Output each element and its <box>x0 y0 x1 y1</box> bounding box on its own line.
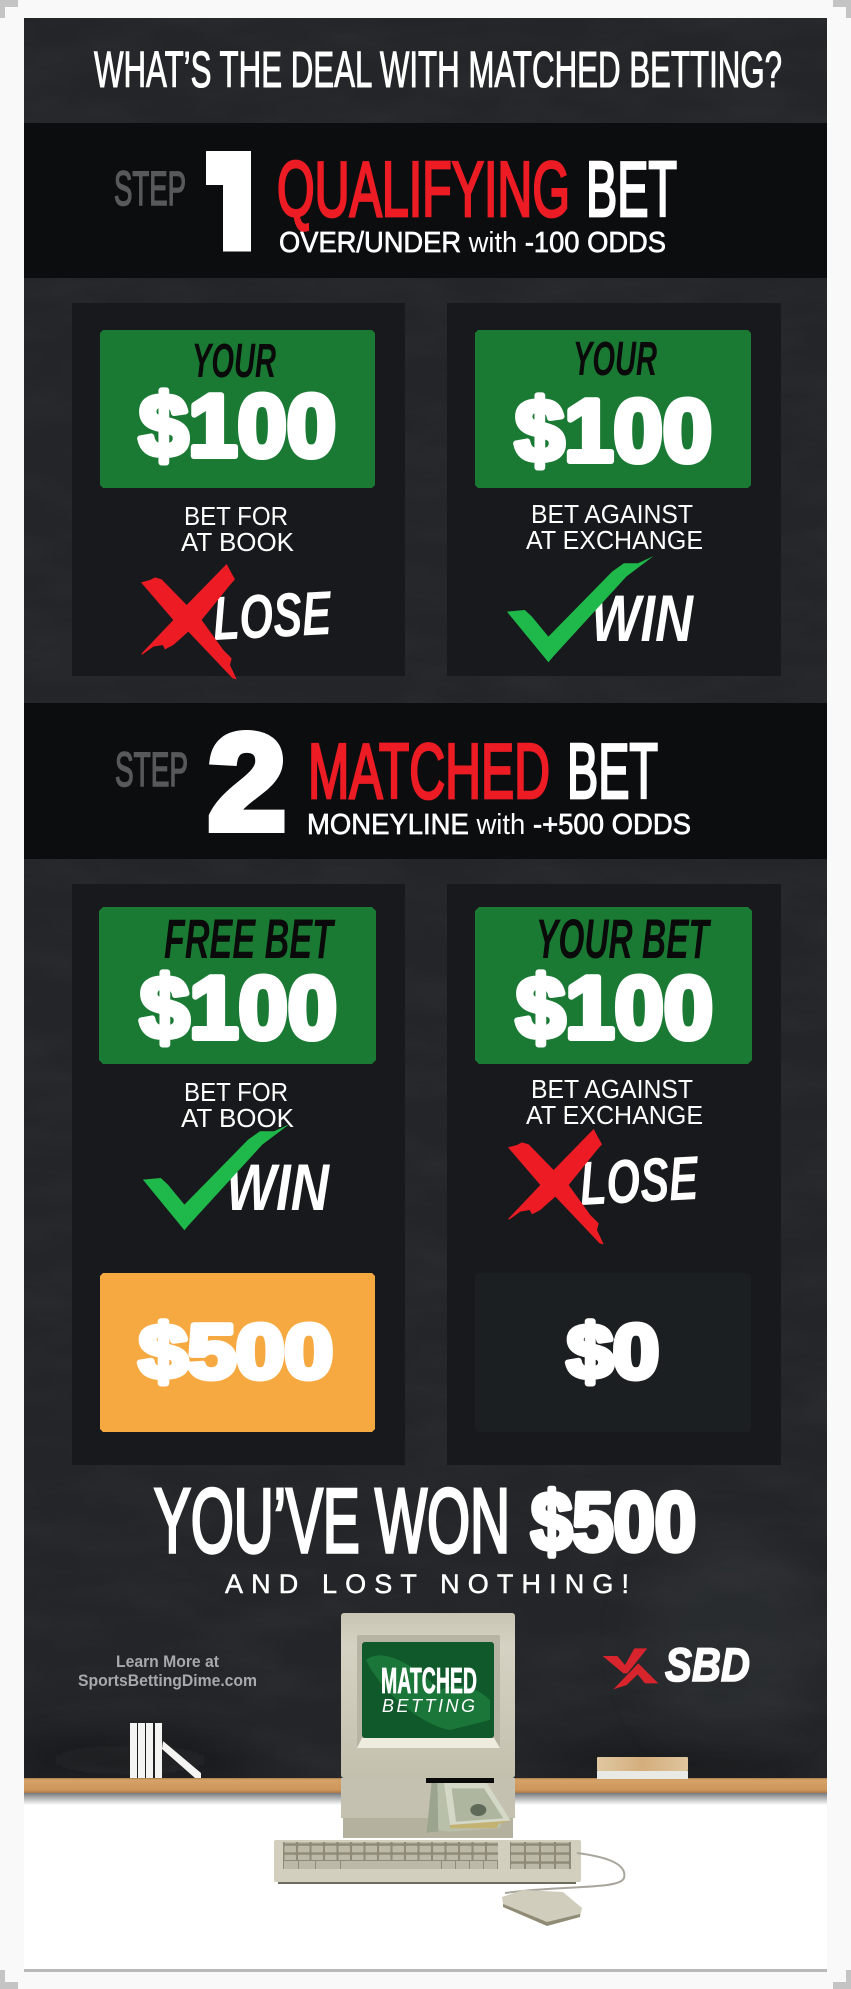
lose result <box>141 564 334 679</box>
logo wordmark: SBD <box>665 1638 750 1691</box>
panel: step 2 left column <box>72 884 405 1465</box>
lose result: LOSE <box>211 579 334 654</box>
step 2 subheading: MONEYLINE with -+500 ODDS <box>307 809 691 841</box>
card: your bet $100 <box>475 907 752 1064</box>
bet description: AT BOOK <box>181 527 295 557</box>
logo mark <box>603 1648 658 1689</box>
lose result <box>508 1129 701 1244</box>
card label: FREE BET <box>164 907 336 970</box>
conclusion subline: AND LOST NOTHING! <box>225 1569 629 1599</box>
learn more link <box>78 1653 257 1690</box>
step 2 heading: MATCHED <box>308 727 550 815</box>
step 1 heading: QUALIFYING <box>277 145 570 233</box>
card label: YOUR <box>192 335 276 388</box>
icon: eraser <box>597 1757 688 1779</box>
card amount: $100 <box>515 381 712 480</box>
screen title: MATCHED <box>381 1660 477 1701</box>
panel: step 1 right column <box>447 303 781 676</box>
card: free bet $100 <box>99 907 376 1064</box>
ledge: chalk tray <box>24 1778 827 1805</box>
monitor <box>341 1613 515 1838</box>
lose result: LOSE <box>578 1144 701 1219</box>
bet description: AT EXCHANGE <box>526 525 703 555</box>
card: your $100 <box>100 330 375 488</box>
bet description: BET AGAINST <box>531 499 693 529</box>
icon: cash <box>427 1782 511 1833</box>
icon: books <box>130 1723 201 1778</box>
win result <box>507 556 694 662</box>
cash slot <box>426 1778 494 1783</box>
icon: red X <box>508 1129 604 1244</box>
card label: YOUR BET <box>536 907 712 970</box>
total winnings: $500 <box>531 1475 696 1568</box>
bet description: BET AGAINST <box>531 1074 693 1104</box>
step 1 subheading: OVER/UNDER with -100 ODDS <box>279 227 666 259</box>
learn more link: Learn More at <box>116 1653 219 1671</box>
card amount: $100 <box>516 958 713 1057</box>
bet description: AT EXCHANGE <box>526 1100 703 1130</box>
card label: YOUR <box>573 333 657 386</box>
mouse <box>502 1890 582 1926</box>
step 2 heading: BET <box>567 727 658 815</box>
card: $0 <box>475 1273 751 1432</box>
icon: red X <box>141 564 237 679</box>
screen subtitle: BETTING <box>382 1696 475 1716</box>
step 1 label: STEP <box>114 163 186 216</box>
panel: step 2 heading band <box>24 703 827 859</box>
illustration: retro computer <box>274 1613 624 1926</box>
panel: step 2 right column <box>447 884 781 1465</box>
step 1 number: 1 <box>150 126 310 275</box>
bet description: BET FOR <box>184 1077 288 1107</box>
card amount: $100 <box>139 376 336 475</box>
loss amount: $0 <box>567 1310 659 1395</box>
step 1 heading: BET <box>586 145 677 233</box>
win result <box>143 1124 330 1230</box>
monitor screen <box>362 1642 494 1738</box>
bet description: AT BOOK <box>181 1103 295 1133</box>
step 2 number: 2 <box>208 706 286 858</box>
winnings amount: $500 <box>139 1310 333 1395</box>
icon: green check <box>507 556 654 662</box>
panel: step 1 left column <box>72 303 405 679</box>
card: your $100 <box>475 330 751 488</box>
icon: green check <box>143 1124 290 1230</box>
panel bottom shadow <box>24 1969 827 1972</box>
win result: WIN <box>226 1150 330 1224</box>
card: $500 winnings <box>100 1273 375 1432</box>
logo: SBD <box>603 1638 750 1691</box>
keyboard <box>274 1840 581 1884</box>
panel: step 1 heading band <box>24 123 827 278</box>
cable <box>505 1853 624 1893</box>
card amount: $100 <box>140 958 337 1057</box>
bet description: BET FOR <box>184 501 288 531</box>
learn more link: SportsBettingDime.com <box>78 1672 257 1690</box>
win result: WIN <box>591 581 694 655</box>
conclusion headline: YOU’VE WON <box>154 1471 510 1572</box>
step 2 label: STEP <box>115 744 188 797</box>
